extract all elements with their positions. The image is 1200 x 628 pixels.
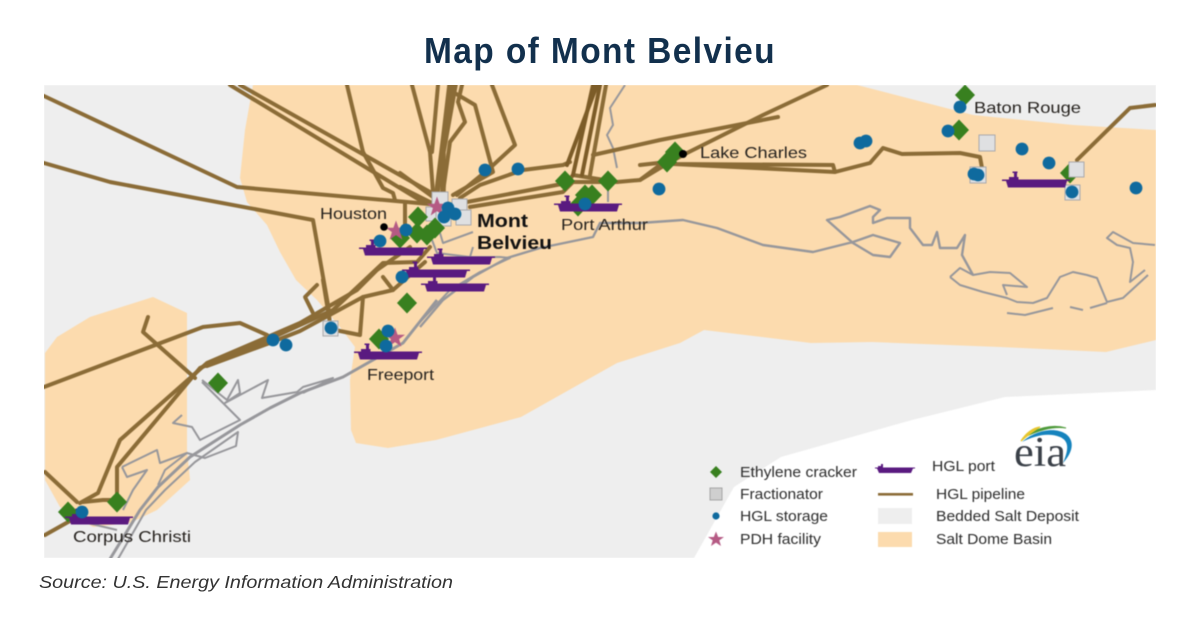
PDH facilities (385, 196, 447, 346)
legend (708, 459, 1079, 548)
city labels (73, 100, 1081, 546)
legend: bedded salt deposit: Bedded Salt Deposit (936, 509, 1079, 525)
salt dome basin: main area (240, 85, 1156, 448)
city dots (380, 150, 687, 231)
legend: salt dome basin (878, 532, 1052, 548)
HGL storage (76, 101, 1142, 518)
title: Map of Mont Belvieu (424, 30, 776, 71)
city labels: Freeport (367, 367, 435, 384)
legend: fractionator: Fractionator (740, 487, 823, 503)
legend: HGL port: HGL port (932, 459, 995, 475)
legend: HGL port (875, 459, 995, 475)
city labels: Lake Charles (700, 145, 807, 162)
icon: eia logo: eia (1014, 430, 1066, 476)
panel: map (44, 84, 1156, 559)
legend: bedded salt deposit (878, 508, 1079, 525)
legend: PDH facility (708, 532, 822, 548)
coastline (75, 85, 1155, 559)
legend: salt dome basin: Salt Dome Basin (936, 532, 1052, 548)
legend: HGL pipeline: HGL pipeline (936, 487, 1025, 503)
legend: PDH facility: PDH facility (740, 532, 822, 548)
source note: Source: U.S. Energy Information Administration (39, 572, 453, 592)
city labels: Port Arthur (561, 217, 649, 234)
city labels: Houston (320, 206, 387, 223)
fractionators (323, 135, 1080, 336)
HGL ports (65, 172, 1070, 524)
ethylene crackers (58, 84, 1080, 522)
fractionator over cracker (1069, 162, 1084, 177)
icon: eia logo (1015, 425, 1072, 468)
HGL pipelines (44, 85, 1155, 535)
legend: HGL storage: HGL storage (740, 509, 828, 525)
bedded salt deposit area (44, 85, 1156, 558)
city labels: Baton Rouge (974, 100, 1081, 117)
legend: fractionator (709, 487, 824, 501)
city labels: Corpus Christi (73, 529, 191, 546)
city labels: Belvieu (477, 233, 552, 253)
city labels: Mont (477, 211, 528, 231)
legend: ethylene cracker: Ethylene cracker (740, 465, 857, 481)
salt dome basin: south Texas area (45, 297, 190, 527)
